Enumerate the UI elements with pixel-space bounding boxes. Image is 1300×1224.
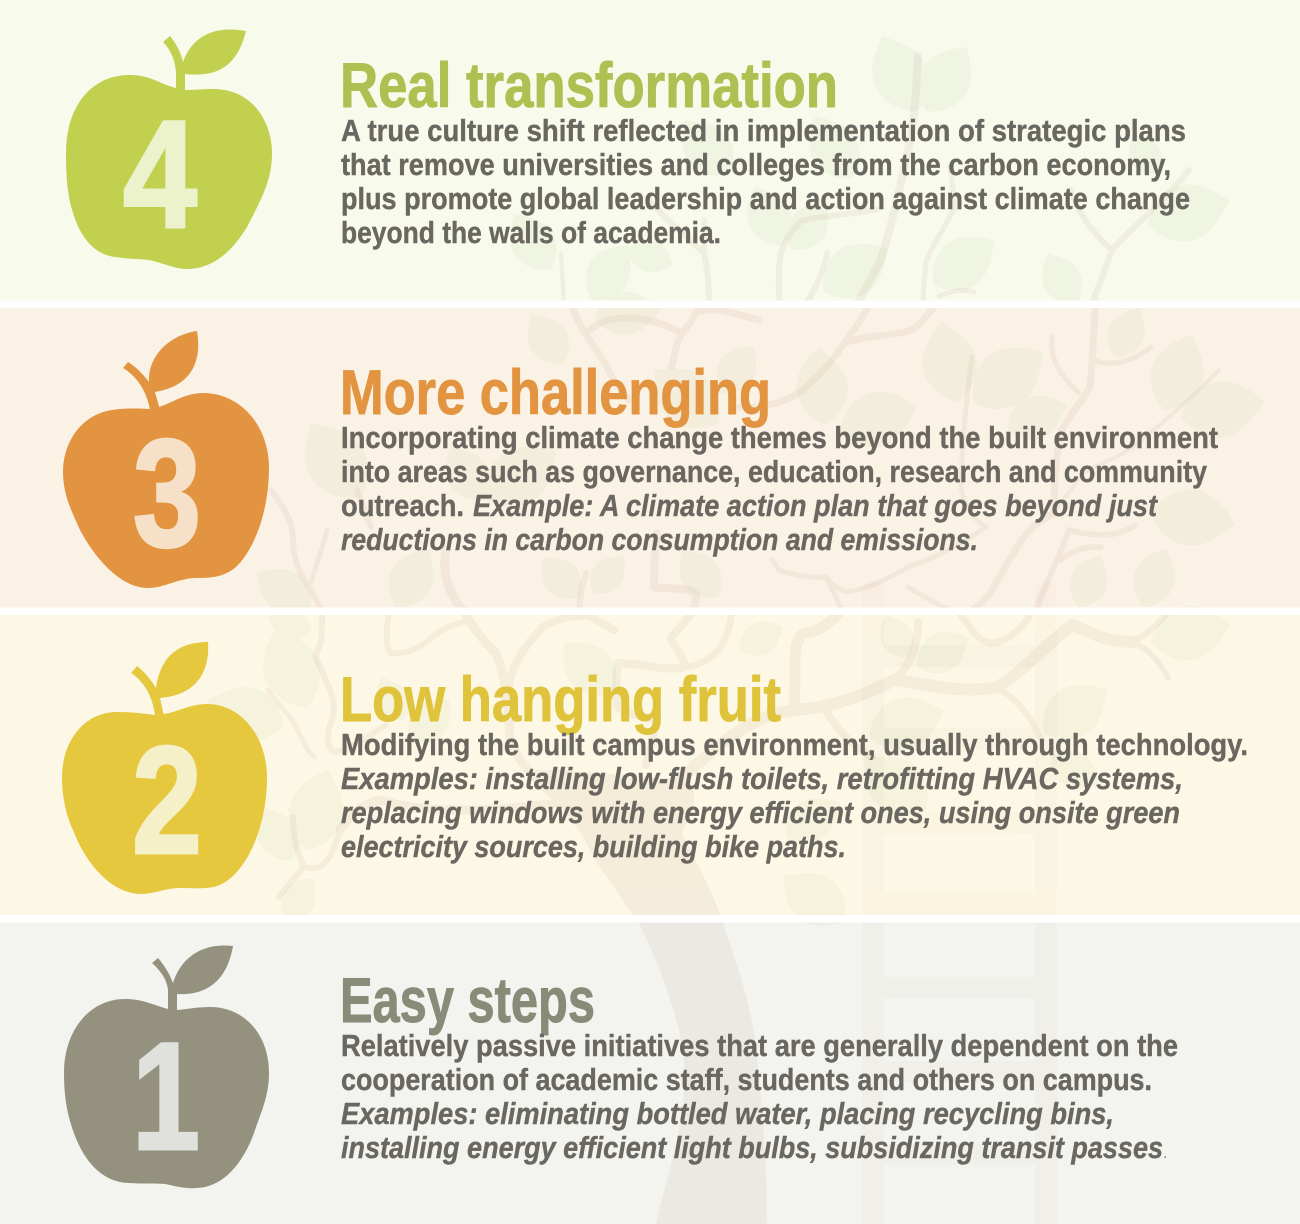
text block: real transformation description bbox=[341, 114, 1190, 250]
text block: easy steps description: installing energy efficient light bulbs, subsidizing transit passes bbox=[341, 1131, 1163, 1165]
text block: real transformation description: that remove universities and colleges from the carbon economy, bbox=[341, 148, 1171, 182]
text block: more challenging description: reductions in carbon consumption and emissions. bbox=[341, 523, 978, 557]
panel: real transformation bbox=[0, 0, 1300, 300]
text block: easy steps description: . bbox=[1163, 1145, 1167, 1162]
text block: real transformation description: plus promote global leadership and action against climate change bbox=[341, 182, 1190, 216]
panel: easy steps bbox=[0, 922, 1300, 1224]
text block: easy steps description bbox=[341, 1029, 1178, 1165]
icon: green apple with number 4: 4 bbox=[123, 89, 197, 260]
icon: orange apple with number 3 bbox=[63, 331, 269, 588]
text block: more challenging description: into areas such as governance, education, research and community bbox=[341, 455, 1207, 489]
text block: more challenging description bbox=[341, 421, 1218, 557]
text block: low hanging fruit description: electricity sources, building bike paths. bbox=[341, 830, 846, 864]
icon: green apple with number 4 bbox=[66, 29, 272, 269]
panel: low hanging fruit bbox=[0, 615, 1300, 915]
text block: easy steps description: Examples: eliminating bottled water, placing recycling bins, bbox=[341, 1097, 1114, 1131]
heading: easy steps: Easy steps bbox=[340, 966, 595, 1036]
icon: orange apple with number 3: 3 bbox=[133, 408, 201, 579]
text block: low hanging fruit description bbox=[341, 728, 1248, 864]
icon: yellow apple with number 2: 2 bbox=[132, 715, 202, 886]
heading: low hanging fruit: Low hanging fruit bbox=[340, 665, 781, 735]
heading: more challenging: More challenging bbox=[340, 358, 771, 428]
icon: grey apple with number 1 bbox=[64, 945, 269, 1188]
text block: low hanging fruit description: Examples: installing low-flush toilets, retrofitting HVAC systems, bbox=[341, 762, 1183, 796]
panel: more challenging bbox=[0, 308, 1300, 608]
text block: easy steps description: cooperation of academic staff, students and others on campus. bbox=[341, 1063, 1152, 1097]
text block: more challenging description: Example: A climate action plan that goes beyond just bbox=[473, 489, 1159, 523]
text block: easy steps description: Relatively passive initiatives that are generally dependent on the bbox=[341, 1029, 1178, 1063]
text block: low hanging fruit description: replacing windows with energy efficient ones, using onsite green bbox=[341, 796, 1180, 830]
heading: real transformation: Real transformation bbox=[340, 51, 838, 121]
text block: more challenging description: Incorporating climate change themes beyond the built environment bbox=[341, 421, 1218, 455]
icon: yellow apple with number 2 bbox=[62, 642, 267, 894]
text block: real transformation description: A true culture shift reflected in implementation of strategic plans bbox=[341, 114, 1186, 148]
icon: grey apple with number 1: 1 bbox=[132, 1011, 200, 1182]
text block: more challenging description: outreach. bbox=[341, 489, 464, 523]
text block: real transformation description: beyond the walls of academia. bbox=[341, 216, 721, 250]
